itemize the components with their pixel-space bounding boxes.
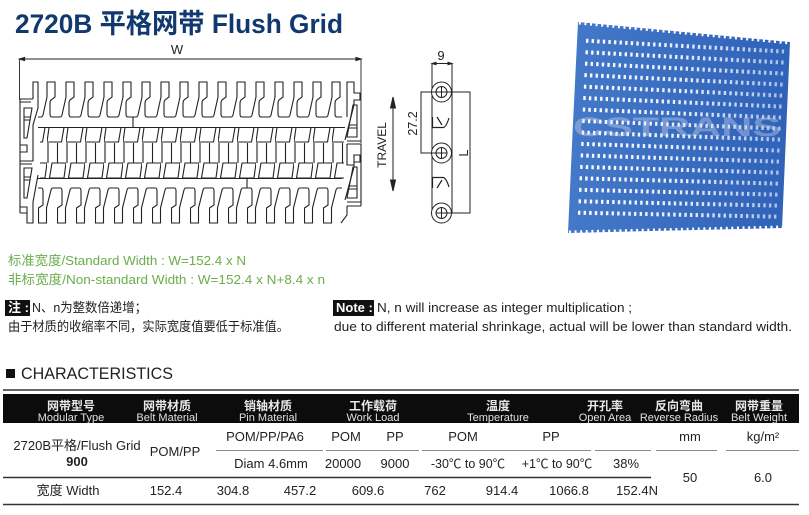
belt product photo xyxy=(568,22,790,233)
table body: 宽度 Width xyxy=(37,483,99,498)
table body: PP xyxy=(542,429,560,444)
table body: 762 xyxy=(424,483,446,498)
characteristics table xyxy=(3,390,799,504)
table body: 914.4 xyxy=(486,483,518,498)
table body: 50 xyxy=(683,470,697,485)
table body: Diam 4.6mm xyxy=(234,456,308,471)
table body: POM/PP xyxy=(150,444,200,459)
table body: 6.0 xyxy=(754,470,772,485)
table body: 20000 xyxy=(325,456,361,471)
module lines and connectors xyxy=(37,117,345,188)
table body xyxy=(13,429,780,498)
dimension L: L xyxy=(457,149,471,156)
table body: 9000 xyxy=(381,456,409,471)
table header: 销轴材质 xyxy=(244,398,292,413)
table body: -30℃ to 90℃ xyxy=(431,457,505,471)
table header: 温度 xyxy=(486,398,510,413)
table header: 开孔率 xyxy=(587,398,623,413)
interlocking middle rows xyxy=(40,126,344,180)
table body: +1℃ to 90℃ xyxy=(522,457,592,471)
table body: 38% xyxy=(613,456,639,471)
bottom fingers row xyxy=(38,185,342,225)
table header: 反向弯曲 xyxy=(655,398,703,413)
table header: 网带型号 xyxy=(47,398,95,413)
table body: POM/PP/PA6 xyxy=(226,429,304,444)
note in English xyxy=(333,300,792,334)
title: 2720B 平格网带 Flush Grid xyxy=(15,9,343,39)
table header: Pin Material xyxy=(239,412,297,424)
travel arrow xyxy=(375,97,396,191)
travel arrow: TRAVEL xyxy=(375,122,389,168)
dimension 9 xyxy=(432,48,452,65)
note in Chinese: N、n为整数倍递增； xyxy=(32,300,147,316)
table header: Work Load xyxy=(346,412,400,424)
note in Chinese xyxy=(5,300,289,334)
table body: 2720B平格/Flush Grid xyxy=(13,438,141,453)
width formulas xyxy=(8,253,325,287)
table header: Belt Material xyxy=(136,412,198,424)
table body: 457.2 xyxy=(284,483,316,498)
table body: 609.6 xyxy=(352,483,384,498)
table body: POM xyxy=(331,429,361,444)
table body: 304.8 xyxy=(217,483,249,498)
table body: kg/m² xyxy=(747,429,780,444)
table header: 网带材质 xyxy=(143,398,191,413)
dimension 27.2 xyxy=(406,92,441,153)
top fingers row xyxy=(38,80,342,120)
W dimension: W xyxy=(171,42,184,57)
W dimension xyxy=(20,42,361,143)
table body: PP xyxy=(386,429,404,444)
table body: mm xyxy=(679,429,701,444)
table header: Temperature xyxy=(467,412,529,424)
table header: Open Area xyxy=(579,412,632,424)
table header xyxy=(3,394,799,424)
belt top-view technical drawing xyxy=(20,42,361,225)
note in Chinese: 由于材质的收缩率不同，实际宽度值要低于标准值。 xyxy=(8,319,289,334)
side view drawing xyxy=(375,48,471,223)
note in English: N, n will increase as integer multiplication ; xyxy=(377,300,632,315)
hinge circles xyxy=(432,82,452,223)
dimension 9: 9 xyxy=(437,48,445,63)
table body: POM xyxy=(448,429,478,444)
right edge detail xyxy=(341,82,361,223)
note in English: Note : xyxy=(336,300,373,315)
watermark: CSTRANS xyxy=(573,112,781,142)
table header: 工作载荷 xyxy=(349,398,397,413)
note in Chinese: 注 : xyxy=(8,300,29,315)
table header: Belt Weight xyxy=(731,412,787,424)
note in English: due to different material shrinkage, actual will be lower than standard width. xyxy=(334,319,792,334)
dimension L xyxy=(441,92,471,213)
table header: 网带重量 xyxy=(735,398,783,413)
table header: Modular Type xyxy=(38,412,104,424)
table body: 1066.8 xyxy=(549,483,589,498)
table header: Reverse Radius xyxy=(640,412,719,424)
table rules xyxy=(216,450,799,452)
width formulas: 标准宽度/Standard Width : W=152.4 x N xyxy=(8,253,246,268)
left edge detail xyxy=(20,82,38,223)
dimension 27.2: 27.2 xyxy=(406,111,420,136)
table body: 152.4N xyxy=(616,483,658,498)
width formulas: 非标宽度/Non-standard Width : W=152.4 x N+8.4 x n xyxy=(8,272,325,287)
section heading: CHARACTERISTICS xyxy=(21,364,173,383)
table body: 152.4 xyxy=(150,483,182,498)
rails xyxy=(432,63,452,213)
table body: 900 xyxy=(66,454,88,469)
wedge profiles xyxy=(432,117,449,188)
